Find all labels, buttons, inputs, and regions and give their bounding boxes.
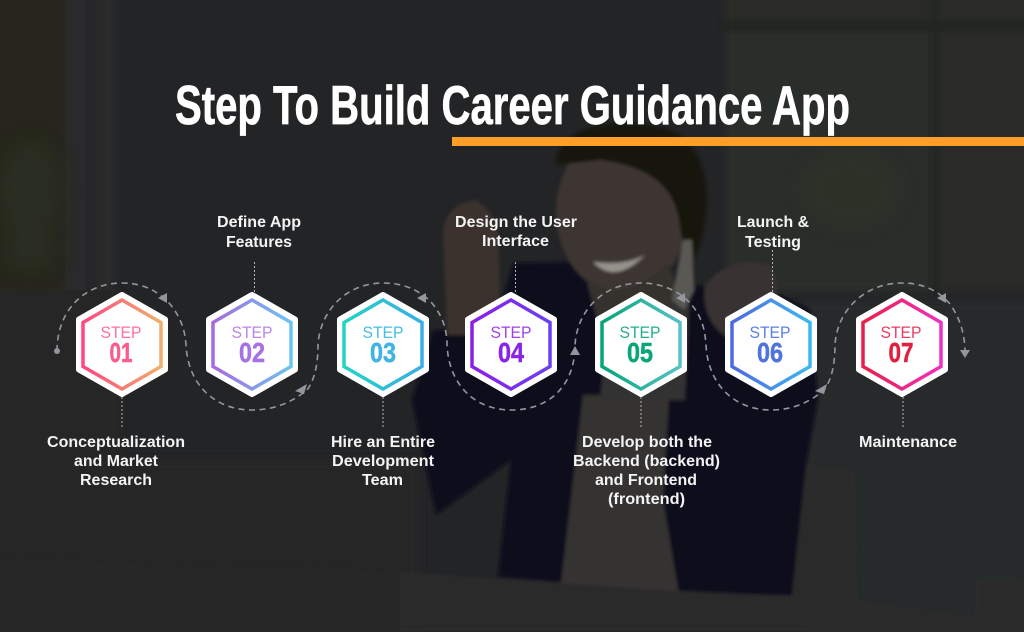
label: step 3: Hire an Entire (331, 434, 435, 451)
step 02: 02 (239, 337, 265, 368)
label: step 2 (217, 214, 301, 251)
step 07: 07 (888, 337, 914, 368)
label: step 4: Interface (482, 233, 549, 250)
start dot (54, 348, 60, 354)
step 06 (728, 295, 814, 394)
label: step 2: Features (226, 234, 292, 251)
step 01: 01 (110, 337, 132, 368)
step 04 (468, 295, 554, 394)
step 02 (209, 295, 295, 394)
label: step 3: Development (332, 453, 434, 470)
step 02: STEP (232, 323, 272, 342)
step 01 (79, 295, 165, 394)
label: step 7: Maintenance (859, 434, 957, 451)
label: step 1: Conceptualization (47, 434, 185, 451)
arrowheads (158, 293, 970, 394)
label: step 4 (455, 214, 577, 250)
label: step 5: and Frontend (595, 472, 697, 489)
label: step 6: Launch & (737, 214, 809, 231)
label: step 4: Design the User (455, 214, 577, 231)
step 03: 03 (370, 337, 396, 368)
dotted connectors (122, 250, 903, 428)
step 07 (859, 295, 945, 394)
step 05 (598, 295, 684, 394)
label: step 3 (331, 434, 435, 489)
label: step 3: Team (362, 472, 403, 489)
step 03: STEP (362, 323, 404, 342)
step 04: 04 (498, 337, 524, 368)
label: step 6: Testing (745, 234, 801, 251)
label: step 2: Define App (217, 214, 301, 231)
label: step 5: Backend (backend) (573, 453, 720, 470)
orange title underline (452, 137, 1024, 146)
step 06: 06 (757, 337, 783, 368)
step 01: STEP (100, 323, 142, 342)
step 03 (340, 295, 426, 394)
step 04: STEP (490, 323, 532, 342)
dashed flow path (54, 283, 970, 410)
label: step 6 (737, 214, 809, 251)
step 07: STEP (880, 323, 922, 342)
label: step 1: and Market (74, 453, 158, 470)
label: step 1 (47, 434, 185, 489)
label: step 5 (573, 434, 720, 508)
step 05: 05 (627, 337, 653, 368)
label: step 1: Research (80, 472, 152, 489)
step 06: STEP (750, 323, 790, 342)
step 05: STEP (620, 323, 660, 342)
label: step 5: (frontend) (608, 491, 685, 508)
label: step 5: Develop both the (582, 434, 712, 451)
